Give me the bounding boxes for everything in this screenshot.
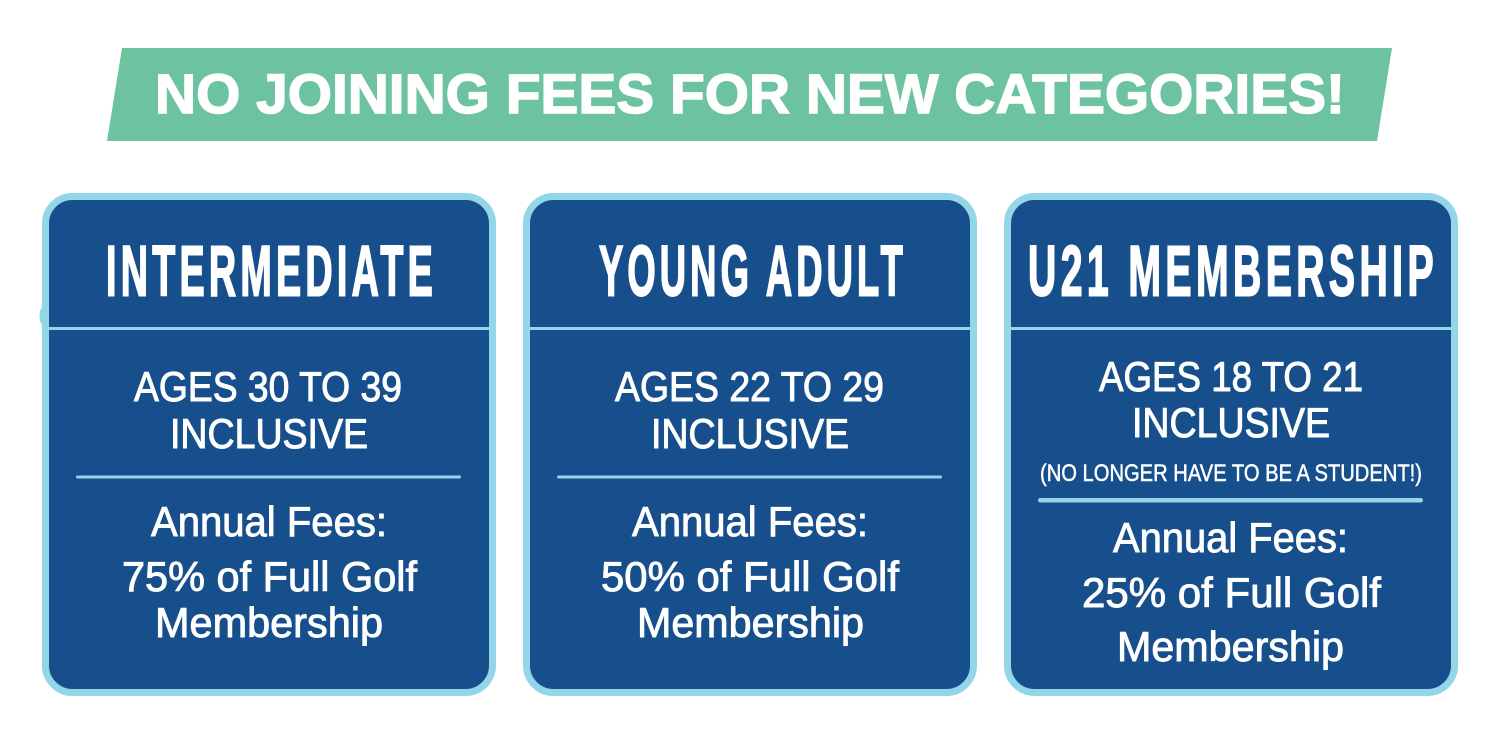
fees: u21 membership: 25% of Full Golf: [1082, 569, 1381, 616]
fees: intermediate: Annual Fees:: [151, 498, 387, 545]
age range: young adult: INCLUSIVE: [651, 410, 849, 457]
panel: intermediate: [46, 196, 492, 692]
fees: intermediate: 75% of Full Golf: [122, 553, 417, 600]
age range: intermediate: [134, 363, 402, 457]
panel: young adult: [526, 196, 974, 692]
panel: u21 membership: [1008, 196, 1454, 692]
title banner: [107, 48, 1392, 141]
fees: young adult: Membership: [637, 599, 864, 646]
title banner: NO JOINING FEES FOR NEW CATEGORIES!: [155, 62, 1345, 125]
age range: young adult: AGES 22 TO 29: [615, 363, 884, 410]
age range: young adult: [615, 363, 884, 457]
heading: young adult: YOUNG ADULT: [599, 232, 907, 312]
fees: u21 membership: [1082, 514, 1381, 670]
fees: young adult: 50% of Full Golf: [601, 553, 899, 600]
fees: u21 membership: Membership: [1117, 623, 1344, 670]
age range: intermediate: INCLUSIVE: [170, 410, 368, 457]
age range: u21 membership: [1099, 353, 1363, 446]
heading: intermediate: INTERMEDIATE: [106, 232, 437, 312]
fees: young adult: Annual Fees:: [632, 498, 868, 545]
note: student: (NO LONGER HAVE TO BE A STUDENT!): [1040, 460, 1422, 487]
fees: u21 membership: Annual Fees:: [1113, 514, 1348, 561]
fees: intermediate: [122, 498, 417, 646]
age range: u21 membership: AGES 18 TO 21: [1099, 353, 1363, 400]
age range: u21 membership: INCLUSIVE: [1132, 399, 1330, 446]
fees: young adult: [601, 498, 899, 646]
age range: intermediate: AGES 30 TO 39: [134, 363, 402, 410]
fees: intermediate: Membership: [155, 599, 383, 646]
